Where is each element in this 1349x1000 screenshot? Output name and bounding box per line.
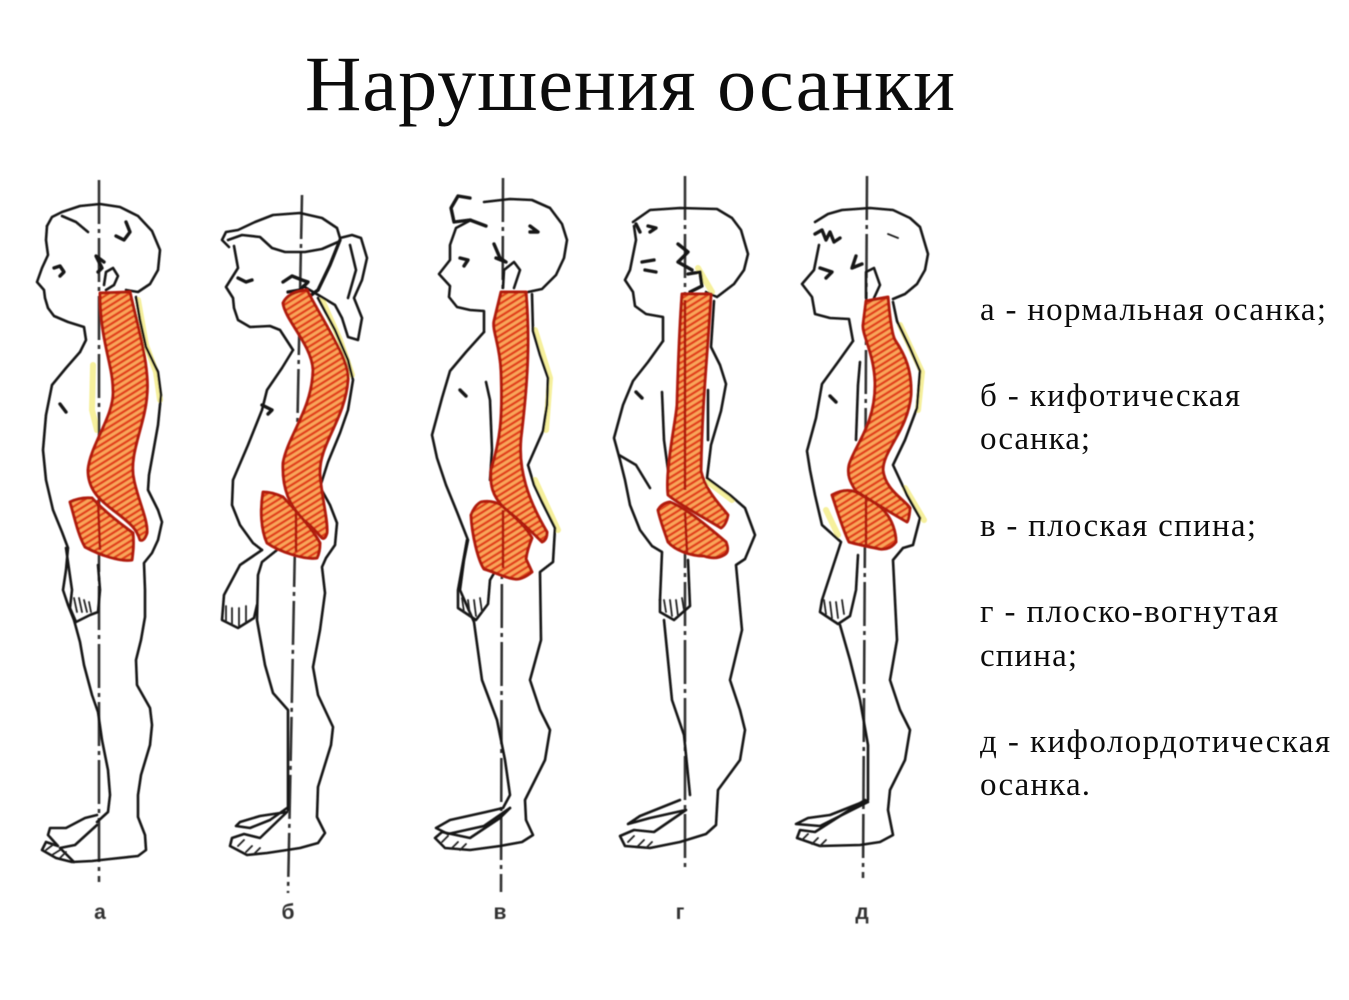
pelvis muscles a <box>70 498 133 560</box>
legend b line 2: осанка; <box>980 421 1090 457</box>
posture axis b <box>288 195 302 893</box>
spine muscles b <box>283 290 348 538</box>
label b: б <box>282 901 295 924</box>
body outline a <box>43 352 110 822</box>
figure b: kyphotic posture <box>222 195 367 924</box>
toes v <box>442 836 466 850</box>
head g <box>633 208 748 297</box>
hair and ponytail b <box>222 213 367 340</box>
legend v: в - плоская спина; <box>980 508 1256 544</box>
figure d: kypholordotic posture <box>796 176 928 924</box>
body outline v <box>432 332 510 834</box>
legend <box>980 292 1330 803</box>
head v <box>484 199 567 292</box>
spine muscles d <box>848 297 911 522</box>
hip glow v <box>535 480 558 530</box>
legend d line 1: д - кифолордотическая <box>980 724 1330 760</box>
toes d <box>802 834 826 846</box>
back glow v <box>535 330 550 430</box>
figure g: flat-concave back <box>614 176 755 924</box>
spine muscles g <box>667 294 728 528</box>
pelvis muscles v <box>471 501 532 579</box>
toes b <box>238 840 260 854</box>
pelvis muscles d <box>832 491 896 549</box>
body outline d <box>807 341 858 624</box>
pelvis muscles b <box>261 492 320 558</box>
buttock glow d <box>826 510 838 535</box>
label g: г <box>676 901 685 924</box>
body outline g <box>614 341 663 600</box>
arm and hand v <box>458 540 496 620</box>
back glow b <box>322 300 352 375</box>
spine muscles v <box>491 292 547 542</box>
legend a: а - нормальная осанка; <box>980 292 1326 328</box>
body outline b <box>232 350 293 550</box>
fingers d <box>824 600 844 618</box>
legend d line 2: осанка. <box>980 767 1090 803</box>
hip glow d <box>905 488 924 520</box>
posture axis d <box>863 176 867 878</box>
posture axis g <box>684 176 686 870</box>
label d: д <box>855 901 869 924</box>
spine muscles a <box>88 292 147 540</box>
back glow a <box>138 300 160 400</box>
head glow g <box>698 268 712 292</box>
hip glow g <box>708 482 732 500</box>
face b <box>226 246 293 350</box>
arm and hand g <box>660 560 690 620</box>
posture axis v <box>501 178 503 892</box>
toes a <box>46 844 66 858</box>
arm and hand b <box>222 550 262 628</box>
arm and hand a <box>66 548 100 622</box>
posture axis a <box>98 180 100 882</box>
back glow d <box>900 325 922 410</box>
figure a: normal posture <box>37 180 162 924</box>
chest glow a <box>92 365 97 430</box>
head d <box>815 208 928 299</box>
toes g <box>628 836 652 848</box>
legend g line 2: спина; <box>980 638 1077 674</box>
figure v: flat back <box>432 178 567 924</box>
label a: а <box>94 901 106 924</box>
pelvis muscles g <box>658 502 728 558</box>
title: Нарушения осанки <box>305 40 955 127</box>
legend g line 1: г - плоско-вогнутая <box>980 594 1278 630</box>
figures <box>37 176 928 924</box>
legend b line 1: б - кифотическая <box>980 378 1240 414</box>
head a <box>47 204 160 292</box>
label v: в <box>494 901 507 924</box>
